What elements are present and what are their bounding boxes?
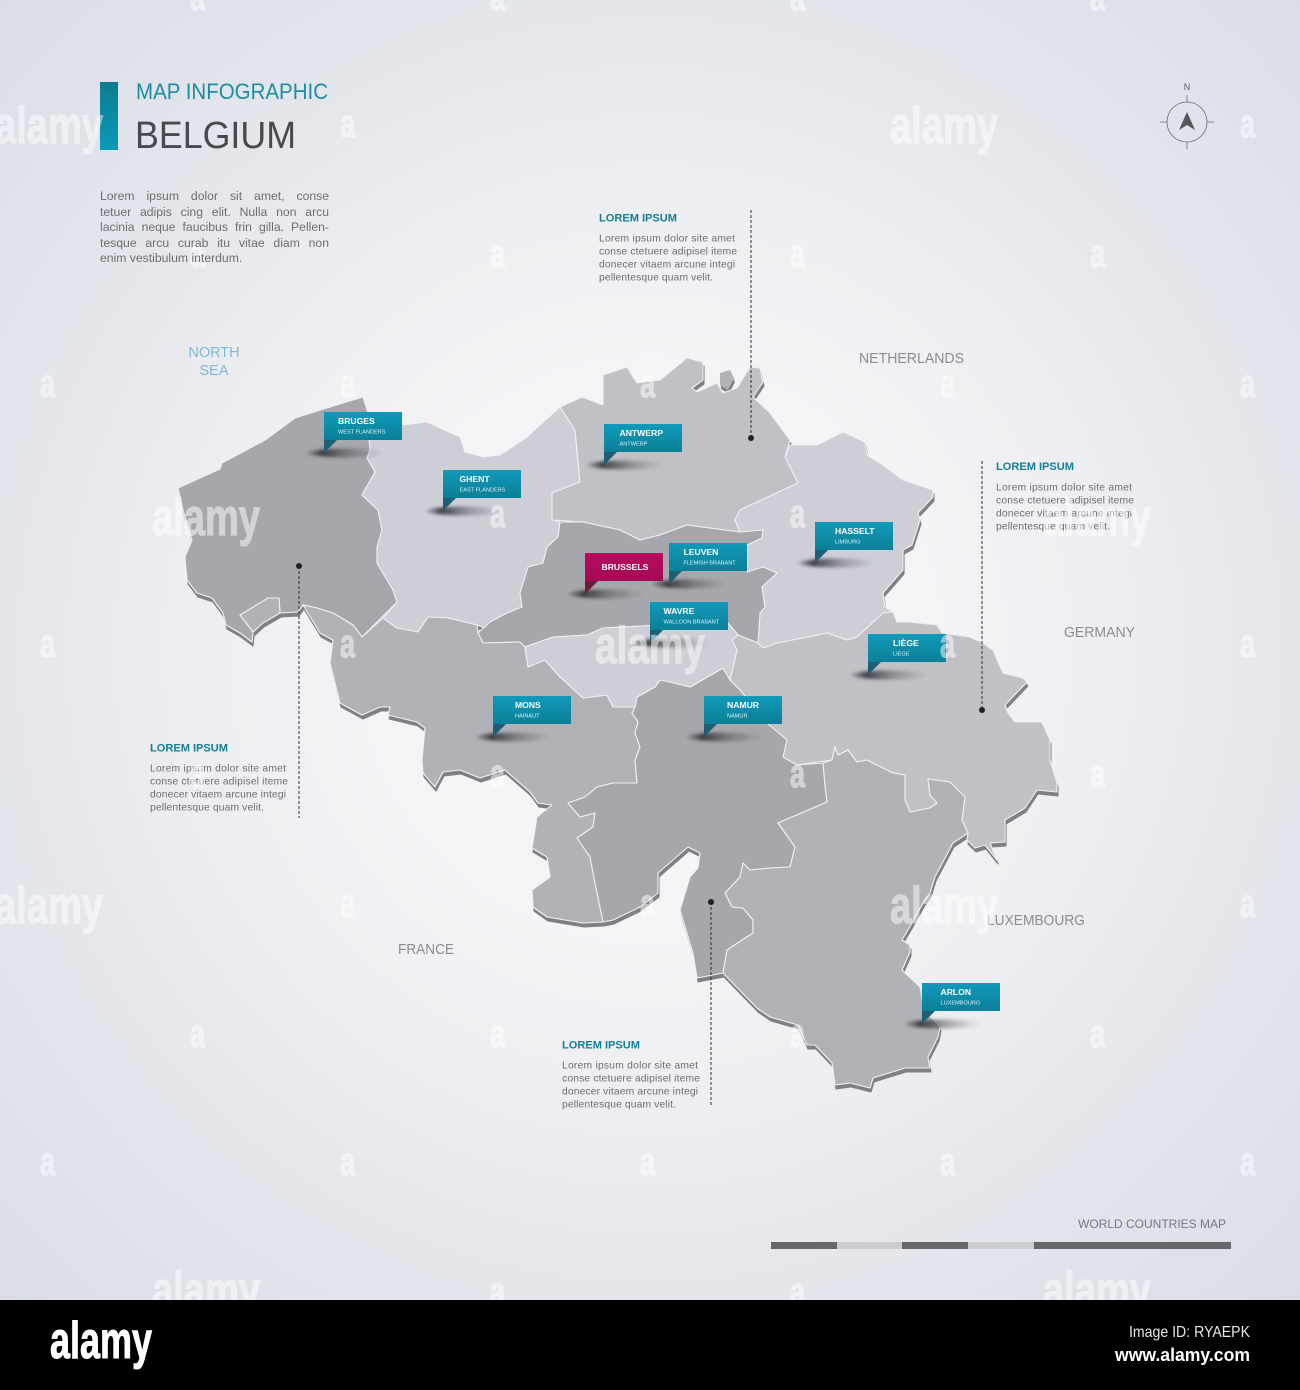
callout: east: Lorem ipsum dolor site amet — [996, 482, 1132, 494]
callout: north: Lorem ipsum dolor site amet — [599, 234, 735, 244]
pin: Antwerp: ANTWERP — [620, 442, 648, 448]
intro paragraph: lacinia neque faucibus frin gilla. Pellen- — [100, 220, 329, 234]
title: map infographic: MAP INFOGRAPHIC — [136, 79, 328, 104]
callout: west: pellentesque quam velit. — [150, 802, 264, 814]
title: Belgium: BELGIUM — [135, 115, 296, 157]
region: Flemish Brabant — [478, 522, 777, 647]
country label: Germany: GERMANY — [1064, 625, 1135, 641]
watermark overlay: a — [790, 1270, 806, 1314]
compass — [1160, 82, 1214, 149]
intro paragraph — [100, 189, 329, 265]
callout: east: conse ctetuere adipisel iteme — [996, 496, 1134, 506]
pin: Namur: NAMUR — [727, 714, 748, 720]
watermark overlay: a — [340, 1140, 356, 1184]
country label: North Sea: NORTH — [188, 345, 240, 361]
callout: south: donecer vitaem arcune integi — [562, 1086, 698, 1098]
region: Hainaut — [303, 605, 640, 923]
pin: Liege — [851, 634, 946, 680]
country label: Luxembourg: LUXEMBOURG — [987, 913, 1085, 929]
country label: North Sea: SEA — [199, 363, 229, 379]
pin: Leuven — [652, 543, 747, 588]
pin: Namur — [687, 696, 782, 742]
pin: Brussels: BRUSSELS — [602, 562, 649, 572]
pin: Antwerp — [587, 424, 682, 470]
watermark overlay: a — [490, 1012, 506, 1056]
pin: Ghent: GHENT — [460, 474, 490, 484]
pin: Arlon — [905, 983, 1000, 1028]
callout: west: LOREM IPSUM — [150, 742, 228, 754]
callout: east — [979, 461, 1134, 713]
pin: Antwerp: ANTWERP — [620, 428, 663, 438]
pin: Namur: NAMUR — [727, 700, 760, 710]
region: Antwerp — [552, 358, 798, 540]
watermark overlay: a — [1090, 232, 1106, 276]
pin: Bruges — [307, 412, 402, 458]
pin: Liege: LIÈGE — [893, 650, 910, 658]
watermark overlay: a — [940, 1140, 956, 1184]
scale bar — [771, 1242, 1231, 1249]
watermark overlay: a — [640, 1140, 656, 1184]
watermark overlay: a — [340, 362, 356, 406]
region: East Flanders — [362, 407, 580, 632]
watermark overlay: a — [340, 102, 356, 146]
pin: Wavre: WAVRE — [664, 606, 695, 616]
callout: south: Lorem ipsum dolor site amet — [562, 1060, 698, 1072]
pin: Bruges: BRUGES — [338, 416, 375, 426]
callout: north: donecer vitaem arcune integi — [599, 260, 735, 270]
pin: Hasselt — [798, 522, 893, 568]
watermark overlay: a — [790, 1012, 806, 1056]
pin: Wavre — [633, 602, 728, 648]
footer band: www.alamy.com — [1114, 1345, 1250, 1365]
pin: Liege: LIÈGE — [893, 638, 919, 648]
intro paragraph: tesque arcu curab itu vitae diam non — [100, 236, 329, 250]
country label: France: FRANCE — [398, 942, 454, 958]
pin: Mons: MONS — [515, 700, 541, 710]
watermark overlay: a — [790, 232, 806, 276]
callout: north: conse ctetuere adipisel iteme — [599, 246, 737, 258]
callout: east: LOREM IPSUM — [996, 461, 1074, 473]
accent bar — [100, 82, 118, 150]
watermark overlay: a — [340, 882, 356, 926]
watermark overlay: a — [190, 752, 206, 796]
callout: south: LOREM IPSUM — [562, 1040, 640, 1052]
region: Limburg — [735, 432, 933, 648]
watermark overlay: alamy — [890, 97, 998, 155]
callout: south: conse ctetuere adipisel iteme — [562, 1074, 700, 1084]
pin: Arlon: LUXEMBOURG — [940, 1000, 980, 1006]
pin: Mons: HAINAUT — [515, 714, 540, 720]
watermark overlay: alamy — [595, 617, 705, 675]
region: Walloon Brabant — [525, 622, 738, 707]
watermark overlay: a — [490, 752, 506, 796]
watermark overlay: a — [340, 622, 356, 666]
callout: west: donecer vitaem arcune integi — [150, 790, 286, 800]
watermark overlay: alamy — [152, 1262, 260, 1320]
watermark overlay: a — [790, 752, 806, 796]
watermark overlay: alamy — [1043, 1262, 1151, 1320]
region: Liege — [730, 612, 1057, 860]
callout: west — [150, 563, 302, 818]
callout: north — [599, 210, 754, 441]
footer band — [0, 1300, 1300, 1390]
watermark overlay: a — [1090, 1012, 1106, 1056]
callout: north: pellentesque quam velit. — [599, 272, 713, 284]
watermark overlay: a — [640, 882, 656, 926]
footer band: Image ID: RYAEPK — [1129, 1324, 1250, 1341]
watermark overlay: a — [1240, 622, 1256, 666]
map of Belgium — [178, 358, 1057, 1088]
watermark overlay: a — [1240, 102, 1256, 146]
watermark overlay: a — [190, 232, 206, 276]
watermark overlay: a — [190, 1012, 206, 1056]
intro paragraph: tetuer adipis cing elit. Nulla non arcu — [100, 204, 329, 218]
watermark overlay: a — [940, 622, 956, 666]
callout: east: pellentesque quam velit. — [996, 522, 1110, 532]
intro paragraph: enim vestibulum interdum. — [100, 251, 242, 265]
callout: south — [562, 899, 714, 1110]
pin: Arlon: ARLON — [940, 987, 971, 997]
pin: Mons — [476, 696, 571, 742]
watermark overlay: a — [490, 492, 506, 536]
region: Namur — [568, 668, 827, 978]
intro paragraph: Lorem ipsum dolor sit amet, conse — [100, 189, 329, 203]
pin: Hasselt: HASSELT — [835, 526, 875, 536]
callout: south: pellentesque quam velit. — [562, 1100, 676, 1110]
pin: Brussels — [568, 553, 663, 598]
watermark overlay: alamy — [1043, 489, 1151, 547]
watermark overlay: a — [490, 232, 506, 276]
watermark overlay: a — [40, 622, 56, 666]
callout: west: Lorem ipsum dolor site amet — [150, 764, 286, 774]
watermark overlay: a — [40, 362, 56, 406]
pin: Ghent: EAST FLANDERS — [460, 488, 506, 494]
callout: west: conse ctetuere adipisel iteme — [150, 776, 288, 788]
pin: Leuven: FLEMISH BRABANT — [684, 560, 736, 566]
watermark overlay: a — [490, 1270, 506, 1314]
pin: Hasselt: LIMBURG — [835, 540, 860, 546]
region: West Flanders — [178, 397, 397, 642]
watermark overlay: alamy — [890, 877, 998, 935]
watermark overlay: a — [40, 1140, 56, 1184]
watermark overlay: a — [1090, 752, 1106, 796]
scale bar label: WORLD COUNTRIES MAP — [1078, 1217, 1226, 1231]
pin: Bruges: WEST FLANDERS — [338, 430, 386, 436]
footer band: alamy — [50, 1312, 152, 1370]
watermark overlay: a — [790, 492, 806, 536]
compass: N — [1184, 82, 1190, 92]
pin: Leuven: LEUVEN — [684, 547, 718, 557]
watermark overlay: alamy — [152, 489, 260, 547]
region: Luxembourg province — [723, 747, 968, 1088]
watermark overlay: a — [1240, 1140, 1256, 1184]
pin: Ghent — [426, 470, 521, 516]
pin: Wavre: WALLOON BRABANT — [664, 620, 720, 626]
region: Heuvelland enclave — [240, 598, 280, 632]
region: Baarle enclave — [720, 370, 734, 390]
callout: north: LOREM IPSUM — [599, 212, 677, 224]
watermark overlay: a — [640, 362, 656, 406]
callout: east: donecer vitaem arcune integi — [996, 508, 1132, 520]
watermark overlay: a — [940, 362, 956, 406]
watermark overlay: a — [1240, 362, 1256, 406]
country label: Netherlands: NETHERLANDS — [859, 351, 964, 367]
watermark overlay: a — [1240, 882, 1256, 926]
